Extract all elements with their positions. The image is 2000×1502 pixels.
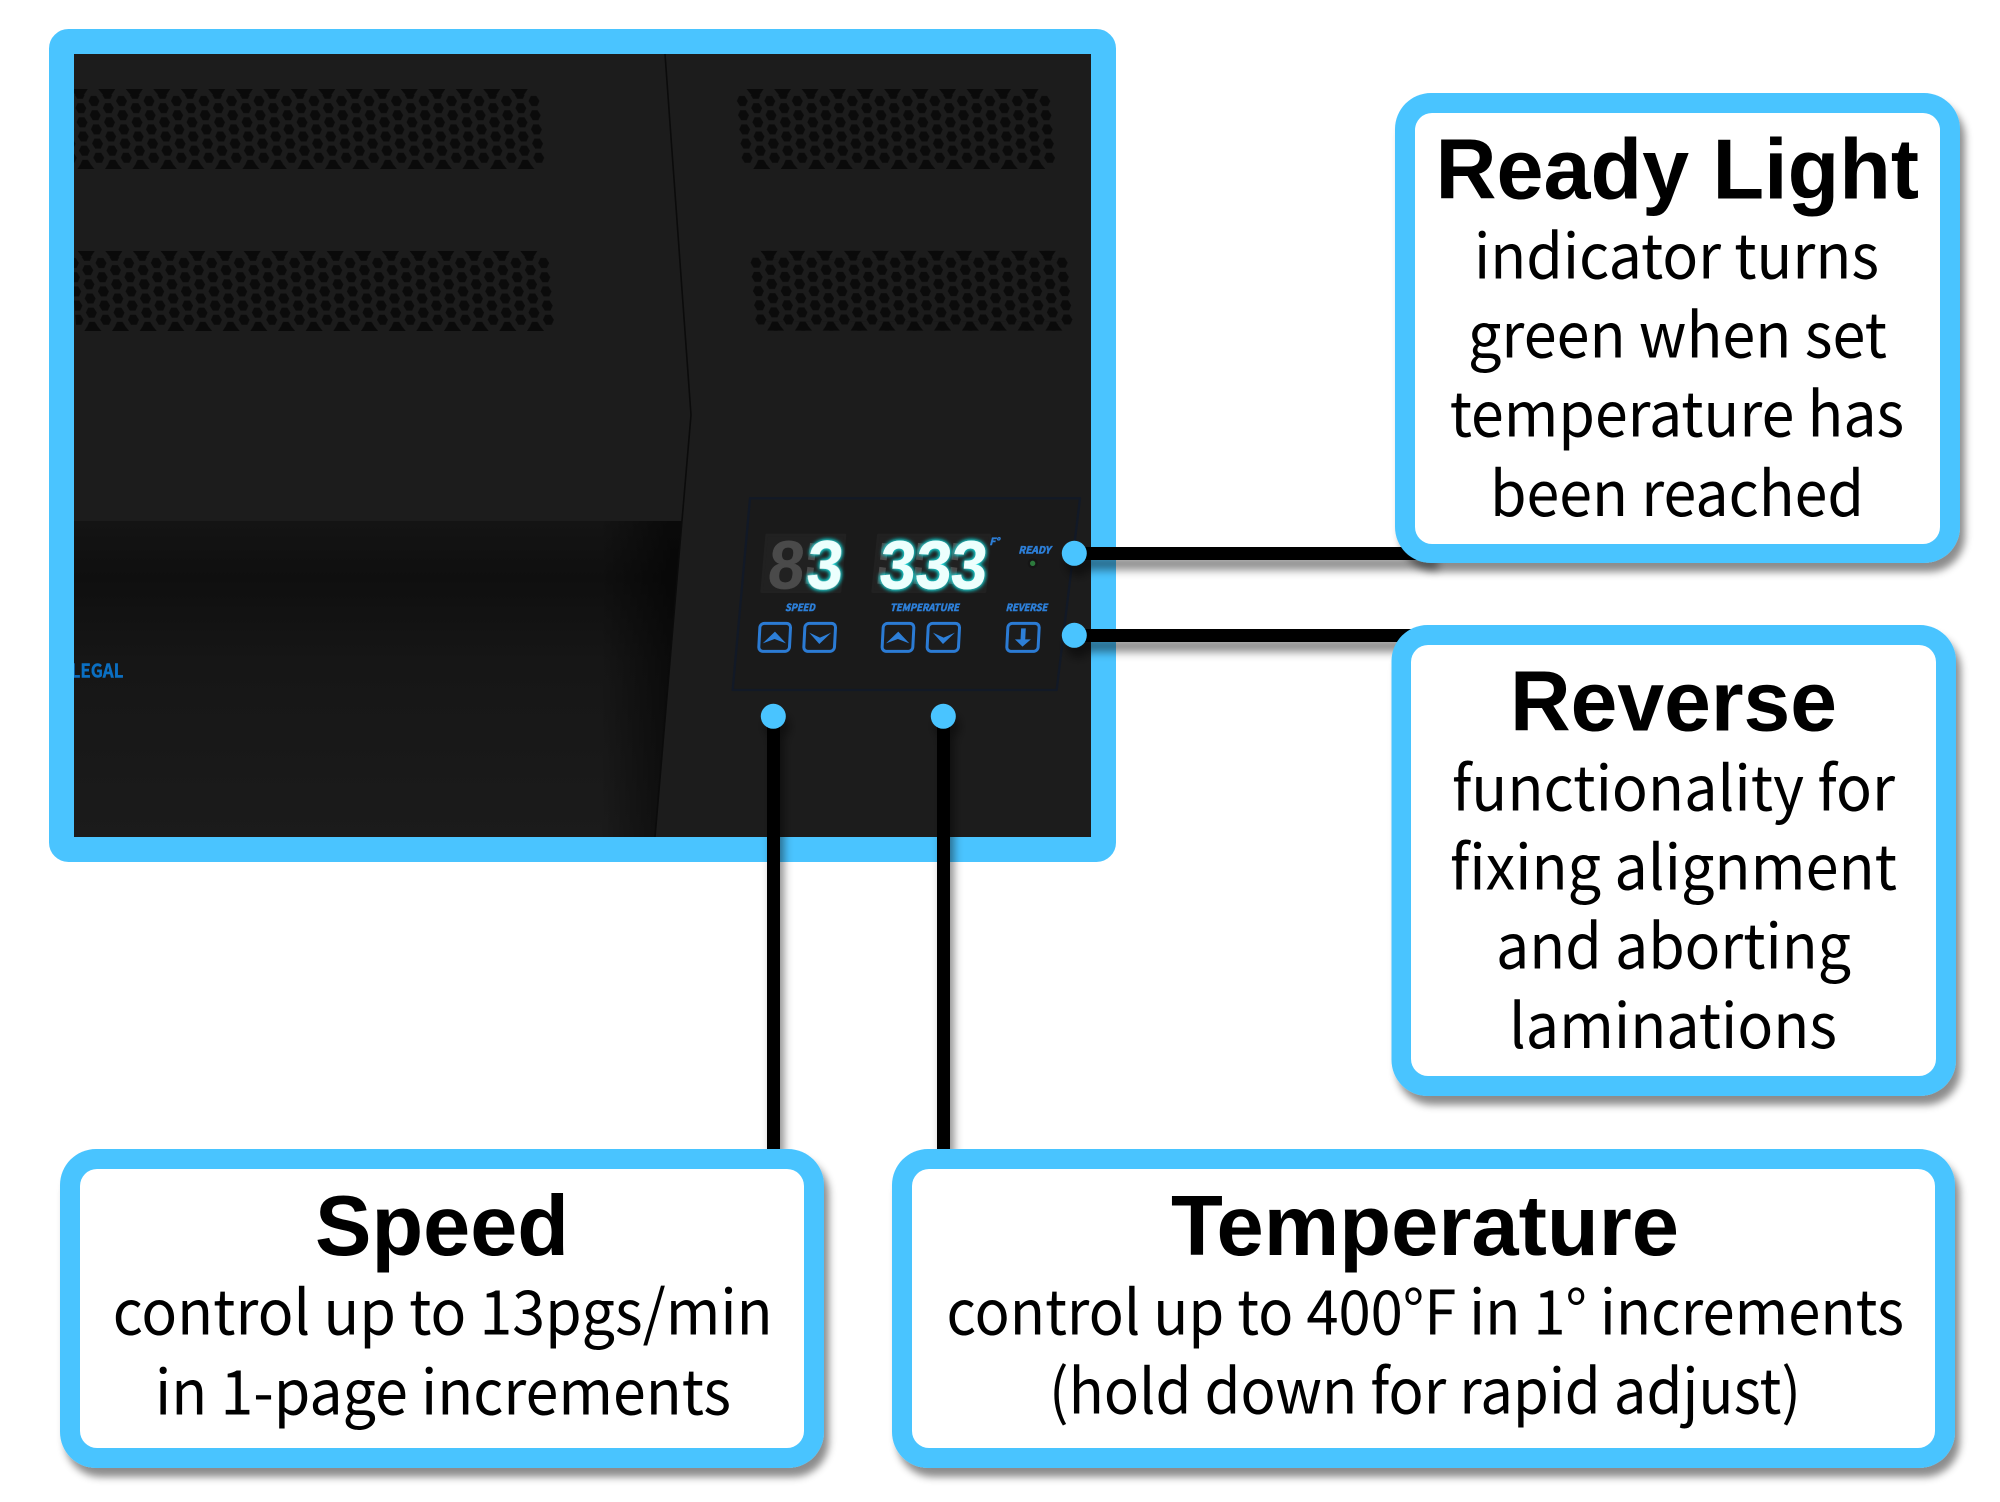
label: LEGAL: LEGAL — [70, 657, 124, 684]
label: TEMPERATURE: TEMPERATURE — [890, 599, 961, 614]
heading: Temperature — [1171, 1179, 1679, 1274]
panel plate — [733, 498, 1080, 690]
description: indicator turns — [1474, 208, 1879, 296]
laminator body — [63, 54, 1091, 837]
callout: Ready Light — [1395, 93, 1960, 563]
unlit display segments — [809, 543, 957, 584]
label: READY: READY — [1018, 541, 1053, 556]
description — [946, 1264, 1904, 1432]
description: in 1-page increments — [155, 1344, 731, 1432]
label: SPEED: SPEED — [785, 599, 817, 614]
control panel — [733, 498, 1080, 690]
callout: Temperature — [892, 1149, 1955, 1468]
connector: temperature — [931, 704, 956, 1166]
description — [113, 1264, 773, 1432]
temperature readout: 333 — [877, 526, 991, 603]
button: temperature up — [882, 623, 914, 651]
speed readout: 03 — [765, 526, 847, 603]
button: speed up — [759, 623, 791, 651]
button: temperature down — [927, 623, 960, 651]
temperature readout: 333: 3 — [913, 526, 955, 603]
connector: speed — [761, 704, 786, 1166]
connector: ready light — [1062, 541, 1434, 566]
blue frame — [62, 42, 1104, 850]
description: fixing alignment — [1450, 818, 1897, 908]
heading: Speed — [315, 1179, 569, 1274]
callout connectors — [761, 541, 1434, 1166]
label: REVERSE: REVERSE — [1006, 599, 1049, 614]
description: control up to 13pgs/min — [113, 1264, 773, 1352]
description: green when set — [1468, 286, 1887, 376]
vent: upper left — [63, 89, 546, 169]
button: reverse — [1007, 623, 1039, 651]
digit backdrop: speed — [762, 535, 845, 592]
description — [1450, 208, 1904, 534]
description: functionality for — [1452, 740, 1895, 828]
vent: lower left — [70, 251, 555, 331]
connector: reverse — [1062, 623, 1414, 648]
speed readout: 03: 3 — [804, 526, 847, 603]
description: (hold down for rapid adjust) — [1049, 1342, 1801, 1432]
temperature readout: 333: 3 — [948, 526, 991, 603]
vent: lower right — [749, 251, 1074, 331]
heading: Reverse — [1510, 655, 1837, 750]
body seam line — [655, 54, 691, 837]
description: temperature has — [1450, 366, 1904, 454]
ready LED — [1028, 558, 1038, 568]
button: speed down — [804, 623, 836, 651]
callout: Speed — [60, 1149, 824, 1468]
paper tray recess — [74, 521, 682, 837]
description: been reached — [1490, 445, 1864, 534]
speed readout: 03: 8 — [765, 526, 808, 603]
temperature readout: 333: 3 — [877, 526, 919, 603]
vent: upper right — [735, 89, 1057, 169]
description: control up to 400°F in 1° increments — [946, 1264, 1904, 1352]
label: fahrenheit: F° — [989, 533, 1001, 548]
digit backdrop: temperature — [873, 535, 990, 592]
description — [1450, 740, 1897, 1066]
heading: Ready Light — [1436, 122, 1919, 218]
description: laminations — [1509, 977, 1837, 1066]
description: and aborting — [1496, 898, 1851, 986]
panel: laminator product view — [62, 42, 1104, 850]
callout: Reverse — [1392, 625, 1956, 1096]
